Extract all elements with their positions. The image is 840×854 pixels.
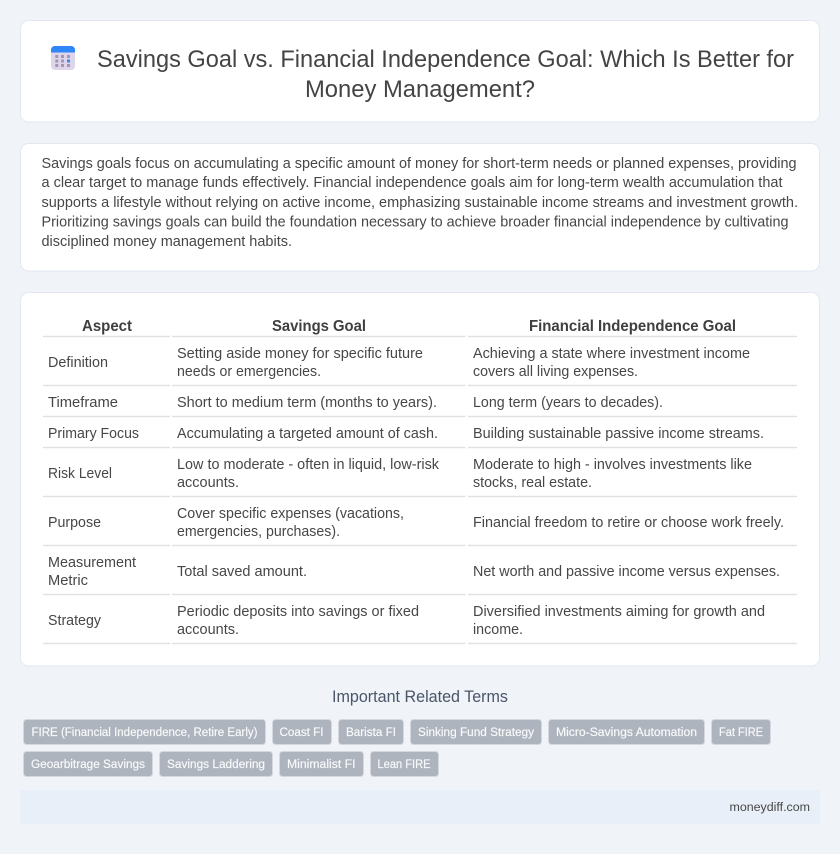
row: definition: covers all living expenses. — [473, 364, 638, 380]
title: Savings Goal vs. Financial Independence Goal: Which Is Better for — [97, 46, 794, 73]
text block: summary paragraph: Savings goals focus on accumulating a specific amount of money for short-term needs or planned expenses, providing — [42, 156, 796, 172]
row: timeframe — [48, 395, 663, 411]
row: definition: Setting aside money for specific future — [177, 346, 423, 362]
row: timeframe: Long term (years to decades). — [473, 395, 663, 411]
tags: related terms: Sinking Fund Strategy — [418, 725, 535, 739]
row: measurement metric: Metric — [48, 573, 88, 589]
row: primary focus: Primary Focus — [48, 426, 139, 442]
panel: summary — [20, 144, 820, 271]
title — [97, 46, 794, 103]
icon: calendar — [51, 46, 75, 70]
heading: important related terms: Important Related Terms — [332, 688, 508, 706]
row: purpose: Cover specific expenses (vacations, — [177, 506, 404, 522]
row: primary focus — [48, 426, 764, 442]
row: risk level: Low to moderate - often in liquid, low-risk — [177, 457, 440, 473]
row: risk level: stocks, real estate. — [473, 475, 592, 491]
tags: related terms: Coast FI — [280, 725, 324, 739]
row: strategy — [48, 604, 765, 638]
tags: related terms: Geoarbitrage Savings — [31, 757, 145, 771]
row: primary focus: Building sustainable passive income streams. — [473, 426, 764, 442]
row: primary focus: Accumulating a targeted amount of cash. — [177, 426, 438, 442]
table header: Savings Goal — [272, 318, 366, 335]
row: definition: Achieving a state where investment income — [473, 346, 750, 362]
table header: Financial Independence Goal — [529, 318, 736, 335]
text block: summary paragraph: Prioritizing savings goals can build the foundation necessary to achieve broader financial independence by cultivating — [42, 214, 788, 230]
row: strategy: Periodic deposits into savings or fixed — [177, 604, 419, 620]
row: strategy: accounts. — [177, 622, 239, 638]
row: timeframe: Short to medium term (months to years). — [177, 395, 437, 411]
tags: related terms: Fat FIRE — [719, 725, 763, 739]
row: measurement metric: Net worth and passive income versus expenses. — [473, 564, 780, 580]
row: measurement metric: Total saved amount. — [177, 564, 307, 580]
title: Money Management? — [305, 76, 535, 103]
row: strategy: Strategy — [48, 613, 102, 629]
row: risk level: Risk Level — [48, 466, 112, 482]
panel: title card — [20, 20, 820, 122]
row: definition — [48, 346, 750, 380]
text block: summary paragraph: disciplined money management habits. — [42, 234, 292, 250]
row: purpose — [48, 506, 784, 540]
tags: related terms: Savings Laddering — [167, 757, 265, 771]
row: risk level — [48, 457, 752, 491]
row: definition: Definition — [48, 355, 108, 371]
table header — [82, 318, 736, 335]
row: risk level: accounts. — [177, 475, 239, 491]
footer: moneydiff.com — [730, 800, 810, 814]
row: definition: needs or emergencies. — [177, 364, 321, 380]
row: purpose: emergencies, purchases). — [177, 524, 340, 540]
panel: comparison table — [20, 292, 820, 666]
text block: summary paragraph — [42, 156, 798, 250]
table header: Aspect — [82, 318, 132, 335]
row: purpose: Purpose — [48, 515, 101, 531]
text block: summary paragraph: supports a lifestyle without relying on active income, emphasizing sustainable income streams and investment growth. — [42, 195, 798, 211]
tags: related terms: Micro-Savings Automation — [556, 725, 697, 739]
text block: summary paragraph: a clear target to manage funds effectively. Financial independence goals aim for long-term wealth accumulation that — [42, 175, 782, 191]
tags: related terms: Minimalist FI — [287, 757, 356, 771]
row: risk level: Moderate to high - involves investments like — [473, 457, 752, 473]
row: timeframe: Timeframe — [48, 395, 118, 411]
footer — [20, 790, 820, 824]
tags: related terms: Lean FIRE — [378, 757, 430, 771]
tags: related terms: FIRE (Financial Independence, Retire Early) — [32, 725, 258, 739]
row: strategy: income. — [473, 622, 523, 638]
tags: related terms: Barista FI — [346, 725, 396, 739]
row: measurement metric — [48, 555, 780, 589]
tags: related terms — [24, 720, 770, 776]
row: purpose: Financial freedom to retire or choose work freely. — [473, 515, 784, 531]
row: strategy: Diversified investments aiming for growth and — [473, 604, 765, 620]
row: measurement metric: Measurement — [48, 555, 136, 571]
